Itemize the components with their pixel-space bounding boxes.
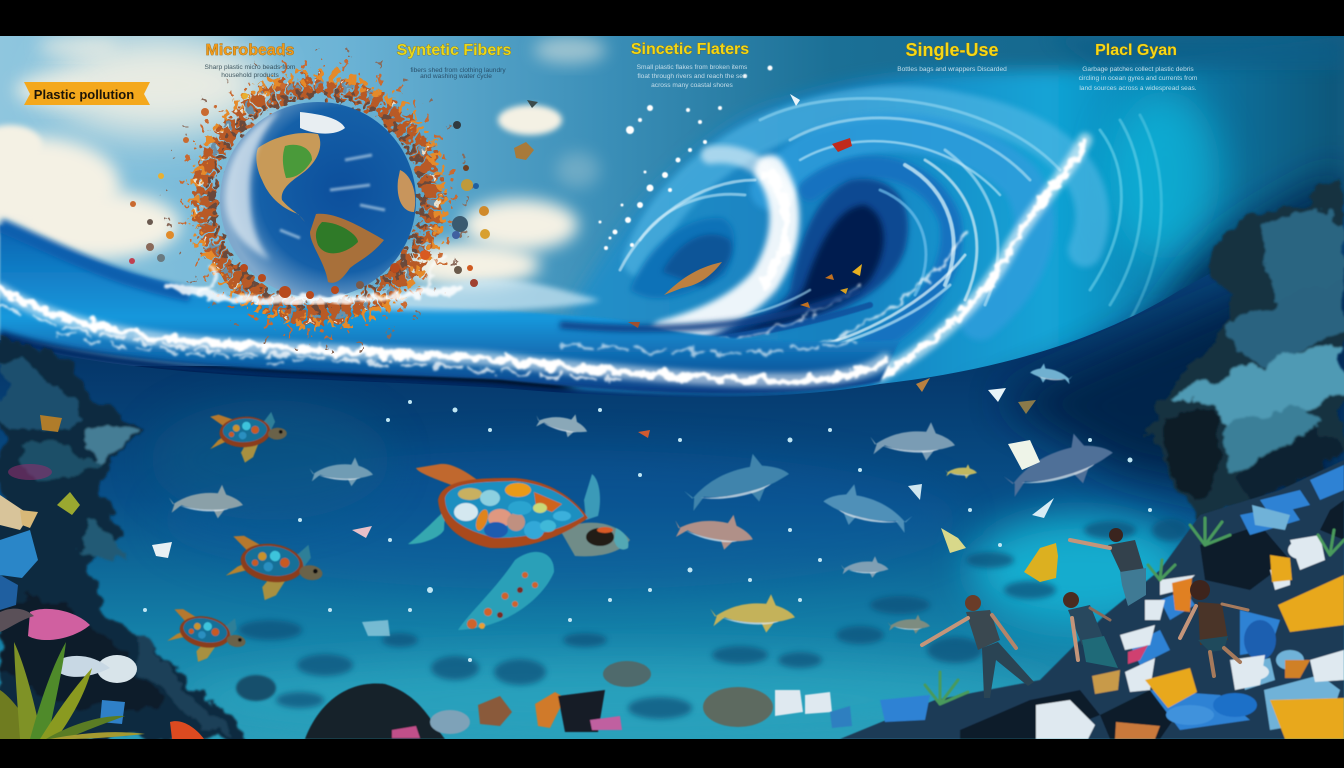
person 2	[1063, 592, 1118, 668]
bottom black bar	[0, 739, 1344, 768]
left rocks	[0, 335, 250, 739]
column: Sincetic Flaters: across many coastal shores	[651, 82, 734, 89]
trash pile	[775, 460, 1344, 739]
column: Sincetic Flaters: Small plastic flakes from broken items	[637, 64, 748, 71]
column: Microbeads: Microbeads	[206, 42, 295, 59]
person 1	[922, 595, 1034, 698]
column: Sincetic Flaters: float through rivers and reach the sea	[637, 73, 747, 80]
sea surface band	[0, 225, 900, 402]
wave swirl	[640, 103, 1092, 345]
icon: sea plant	[0, 642, 145, 739]
continents	[256, 112, 415, 283]
column: Placl Gyan	[1079, 42, 1198, 92]
right rock cliff	[1143, 175, 1344, 520]
blue plastic	[880, 465, 1344, 730]
debris ring	[168, 50, 468, 350]
underwater	[0, 200, 1344, 740]
yellow bag	[1024, 543, 1058, 582]
floating plastic fragments	[143, 378, 1152, 662]
small turtles	[165, 411, 326, 669]
reef life	[0, 530, 38, 578]
column: Syntetic Fibers: Syntetic Fibers	[397, 42, 511, 59]
spray droplets	[598, 66, 772, 250]
person 4	[1180, 580, 1248, 676]
shell plastic pieces	[454, 483, 571, 539]
back flipper	[416, 464, 488, 492]
earth sphere	[220, 102, 416, 298]
banner: Plastic pollution	[24, 82, 150, 105]
column: Syntetic Fibers: fibers shed from clothing laundry	[410, 67, 506, 74]
splash at globe base	[170, 258, 460, 301]
white plastic	[775, 535, 1344, 739]
top black bar	[0, 0, 1344, 36]
seabed patches	[238, 519, 1188, 719]
column: Sincetic Flaters	[631, 41, 749, 89]
column: Single-Use: Bottles bags and wrappers Discarded	[897, 66, 1007, 73]
clouds	[0, 35, 606, 287]
column: Single-Use: Single-Use	[905, 40, 999, 60]
globe with debris ring	[129, 50, 490, 350]
front flipper	[458, 552, 554, 630]
column: Sincetic Flaters: Sincetic Flaters	[631, 41, 749, 58]
foam band	[0, 288, 885, 380]
wave streaks	[600, 98, 1161, 362]
wave eye dark	[590, 179, 908, 347]
white curl crest	[665, 140, 1085, 378]
column: Microbeads: household products	[221, 72, 279, 79]
sky	[0, 35, 1344, 366]
dolphins and fish	[169, 361, 1119, 634]
banner: Plastic pollution: Plastic pollution	[34, 87, 134, 102]
big turtle	[408, 464, 630, 630]
shell	[438, 478, 588, 548]
column: Placl Gyan: Garbage patches collect plastic debris	[1082, 66, 1194, 73]
scattered debris	[129, 83, 490, 287]
dark plastic	[960, 500, 1344, 739]
column: Placl Gyan: land sources across a widespread seas.	[1079, 85, 1197, 92]
column: Single-Use	[897, 40, 1007, 73]
person 3	[1070, 528, 1146, 606]
ocean wave mass	[570, 36, 1344, 420]
column: Placl Gyan: Placl Gyan	[1095, 42, 1177, 59]
column: Placl Gyan: circling in ocean gyres and currents from	[1079, 75, 1198, 82]
head	[560, 523, 630, 556]
cloud streaks	[225, 110, 280, 260]
people collecting plastic	[922, 528, 1248, 698]
first curl	[630, 218, 734, 298]
column: Microbeads: Sharp plastic micro beads from	[205, 64, 296, 71]
column: Microbeads	[205, 42, 296, 79]
flying debris in sky	[514, 94, 862, 328]
yellow and orange plastic	[1092, 555, 1344, 739]
seabed rocks and litter	[236, 620, 852, 739]
icon: sea plants on shore	[925, 518, 1344, 704]
column: Syntetic Fibers: and washing water cycle	[420, 73, 492, 80]
column: Syntetic Fibers	[397, 42, 511, 80]
